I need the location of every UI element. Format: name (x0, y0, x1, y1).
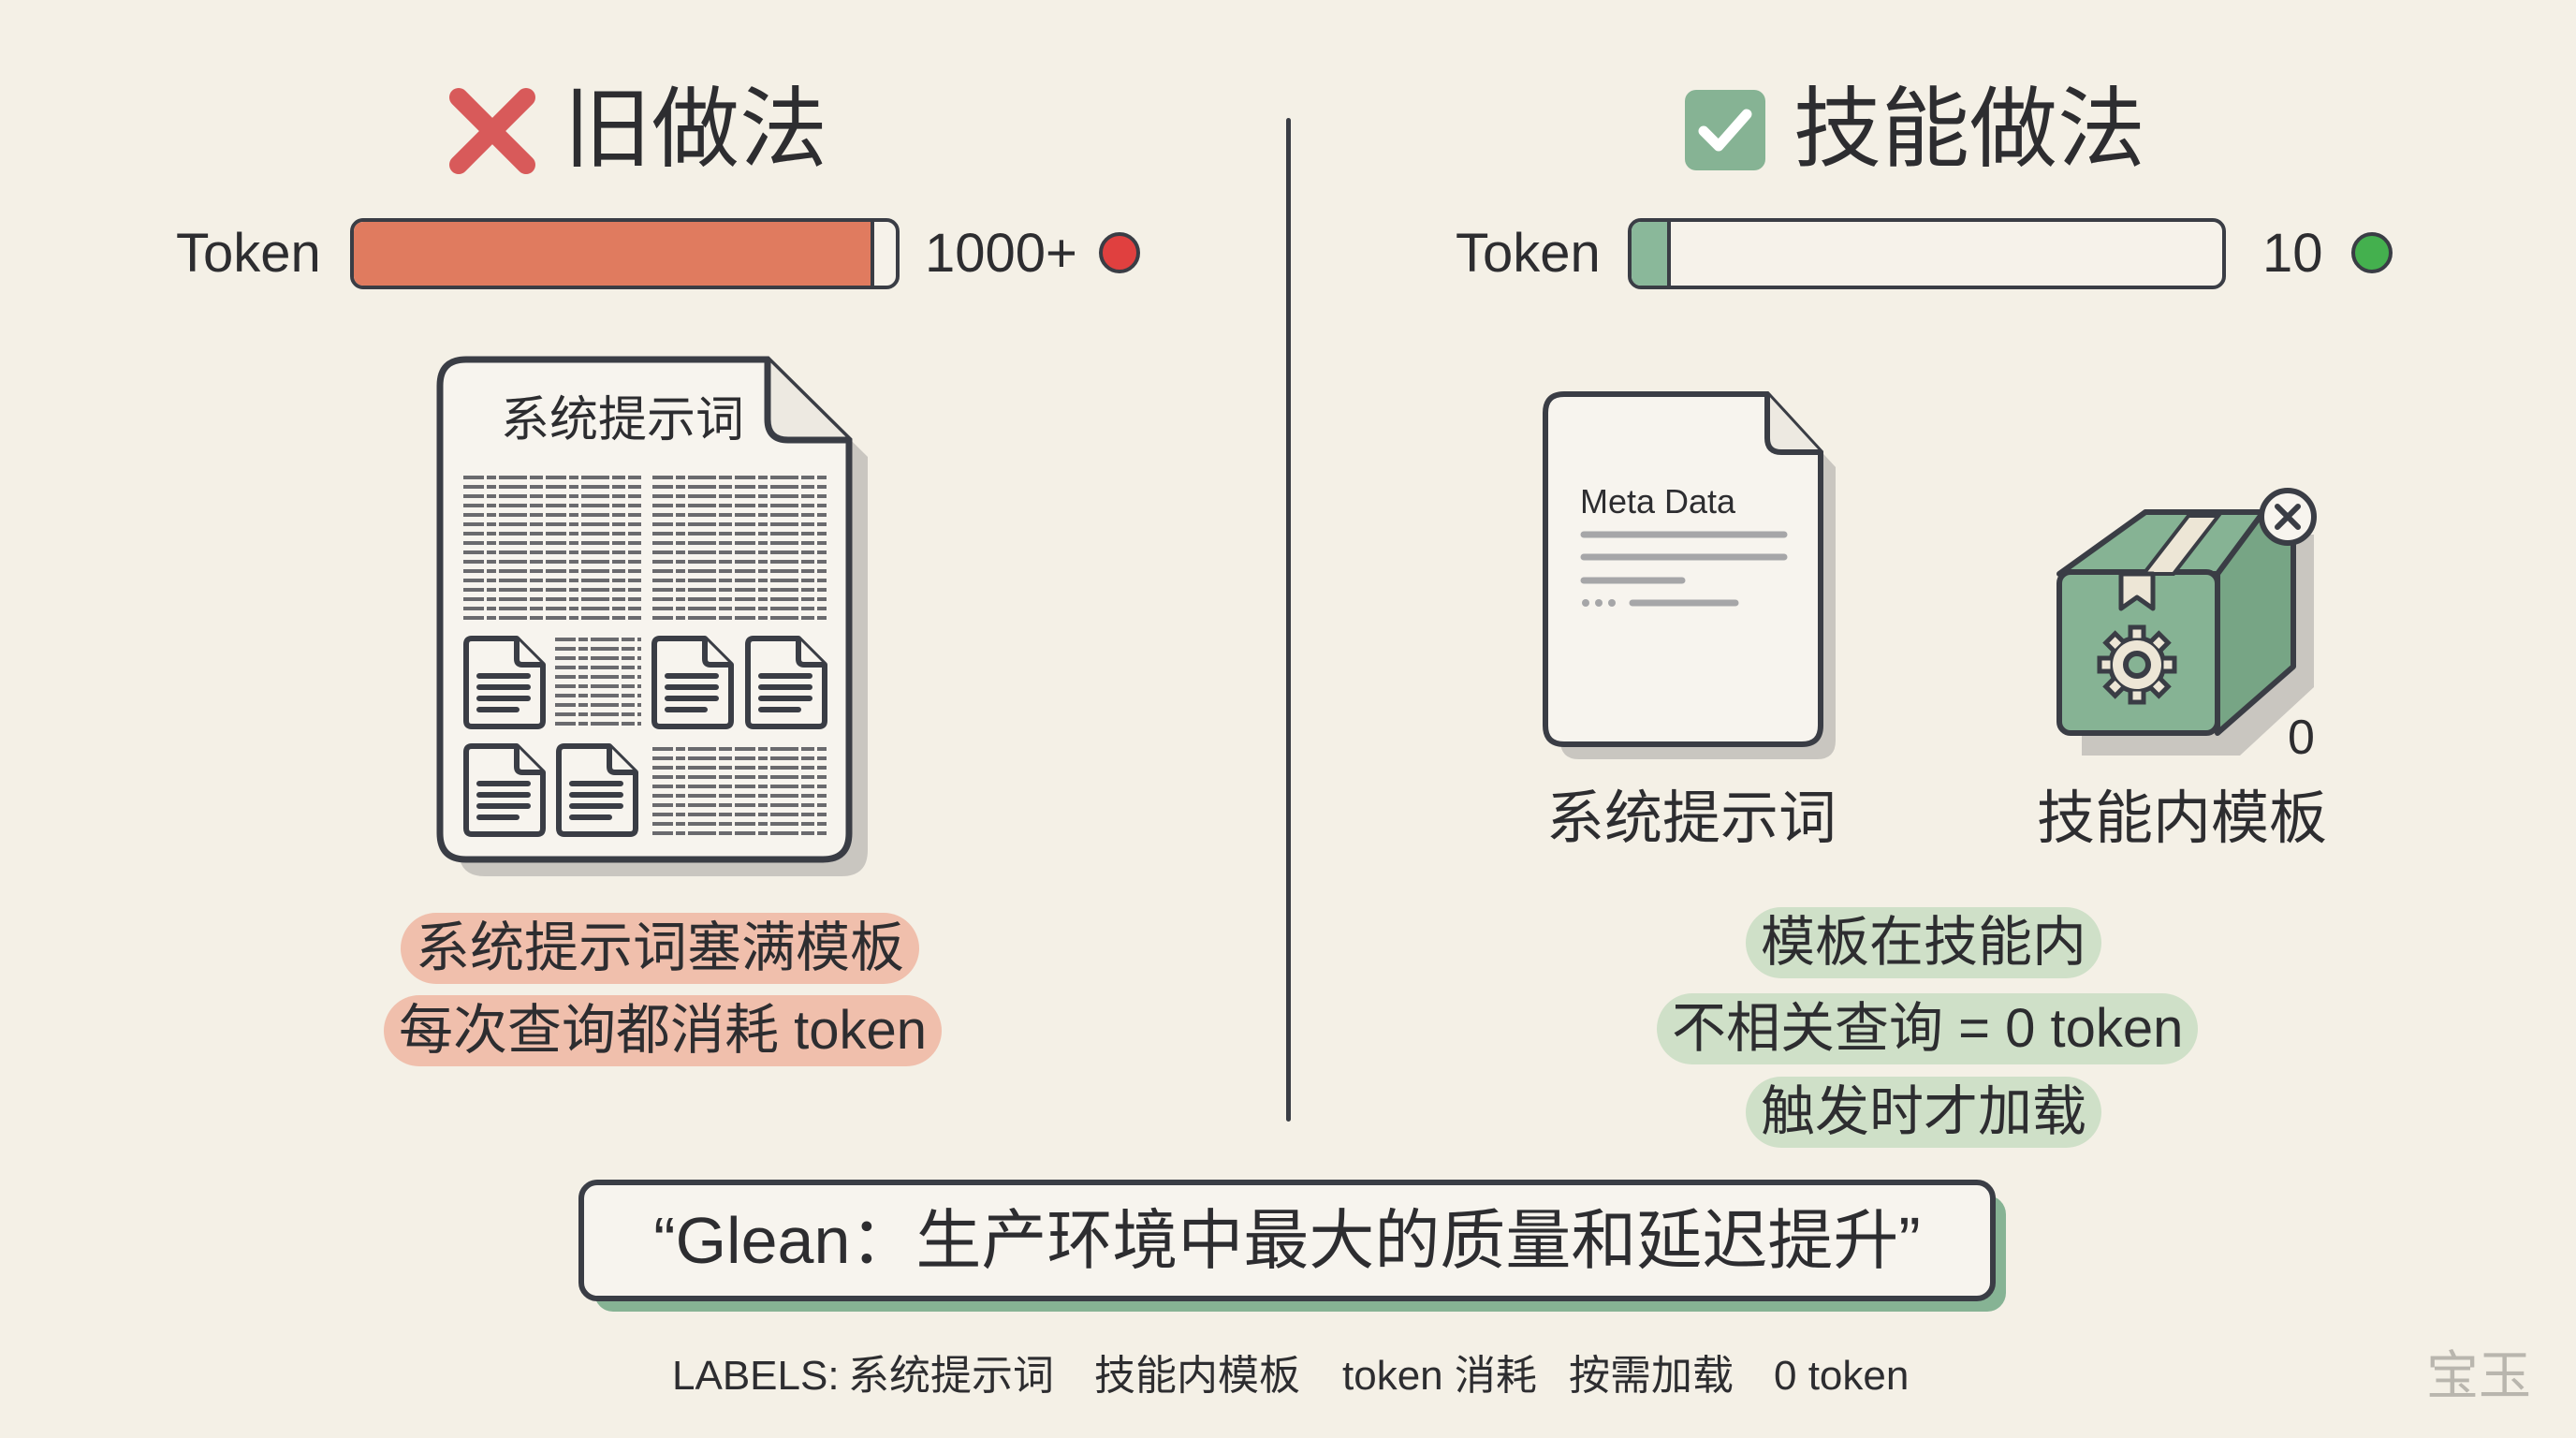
icon: crowded system prompt document: 系统提示词 (501, 393, 744, 448)
caption: old approach (384, 913, 942, 1066)
caption line 1: 模板在技能内 (1761, 912, 2086, 973)
token bar: skills (1456, 218, 2393, 289)
labels row (672, 1353, 1909, 1399)
icon: meta data document (1543, 391, 1836, 759)
watermark: 宝玉 (2426, 1346, 2531, 1405)
token label: Token (176, 223, 321, 284)
value 10: 10 (2262, 223, 2323, 284)
icon: meta data document: Meta Data (1580, 482, 1736, 521)
caption line 2: 不相关查询 = 0 token (1672, 998, 2183, 1059)
green dot (2351, 232, 2393, 273)
divider (1286, 118, 1291, 1122)
value 1000+: 1000+ (925, 223, 1077, 284)
label: system prompt: 系统提示词 (1546, 786, 1837, 851)
bar full (350, 218, 900, 289)
labels row: token 消耗 (1342, 1353, 1537, 1399)
bar nearly empty (1628, 218, 2226, 289)
title: old approach (449, 80, 827, 178)
caption line 3: 触发时才加载 (1761, 1081, 2086, 1142)
title: skills approach (1685, 80, 2145, 178)
labels row: 0 token (1774, 1353, 1909, 1399)
label: skill template: 技能内模板 (2037, 786, 2327, 851)
red dot (1099, 232, 1140, 273)
icon: skill box (2056, 488, 2317, 765)
quote box (578, 1180, 2006, 1312)
caption line 1: 系统提示词塞满模板 (416, 917, 904, 978)
token label: Token (1456, 223, 1601, 284)
token bar: old (176, 218, 1140, 289)
icon: skill box: 0 (2288, 711, 2315, 765)
heading text skills: 技能做法 (1793, 80, 2145, 178)
icon: crowded system prompt document (436, 356, 868, 876)
icon: green check box (1685, 90, 1765, 170)
quote box: “Glean：生产环境中最大的质量和延迟提升” (653, 1204, 1921, 1277)
labels row: 技能内模板 (1094, 1353, 1300, 1399)
icon: red cross (449, 88, 535, 174)
caption line 2: 每次查询都消耗 token (399, 1000, 927, 1061)
labels row: LABELS: (672, 1353, 840, 1399)
caption: skills approach (1657, 907, 2198, 1148)
labels row: 按需加载 (1569, 1353, 1734, 1399)
labels row: 系统提示词 (848, 1353, 1054, 1399)
heading text old: 旧做法 (564, 80, 827, 178)
